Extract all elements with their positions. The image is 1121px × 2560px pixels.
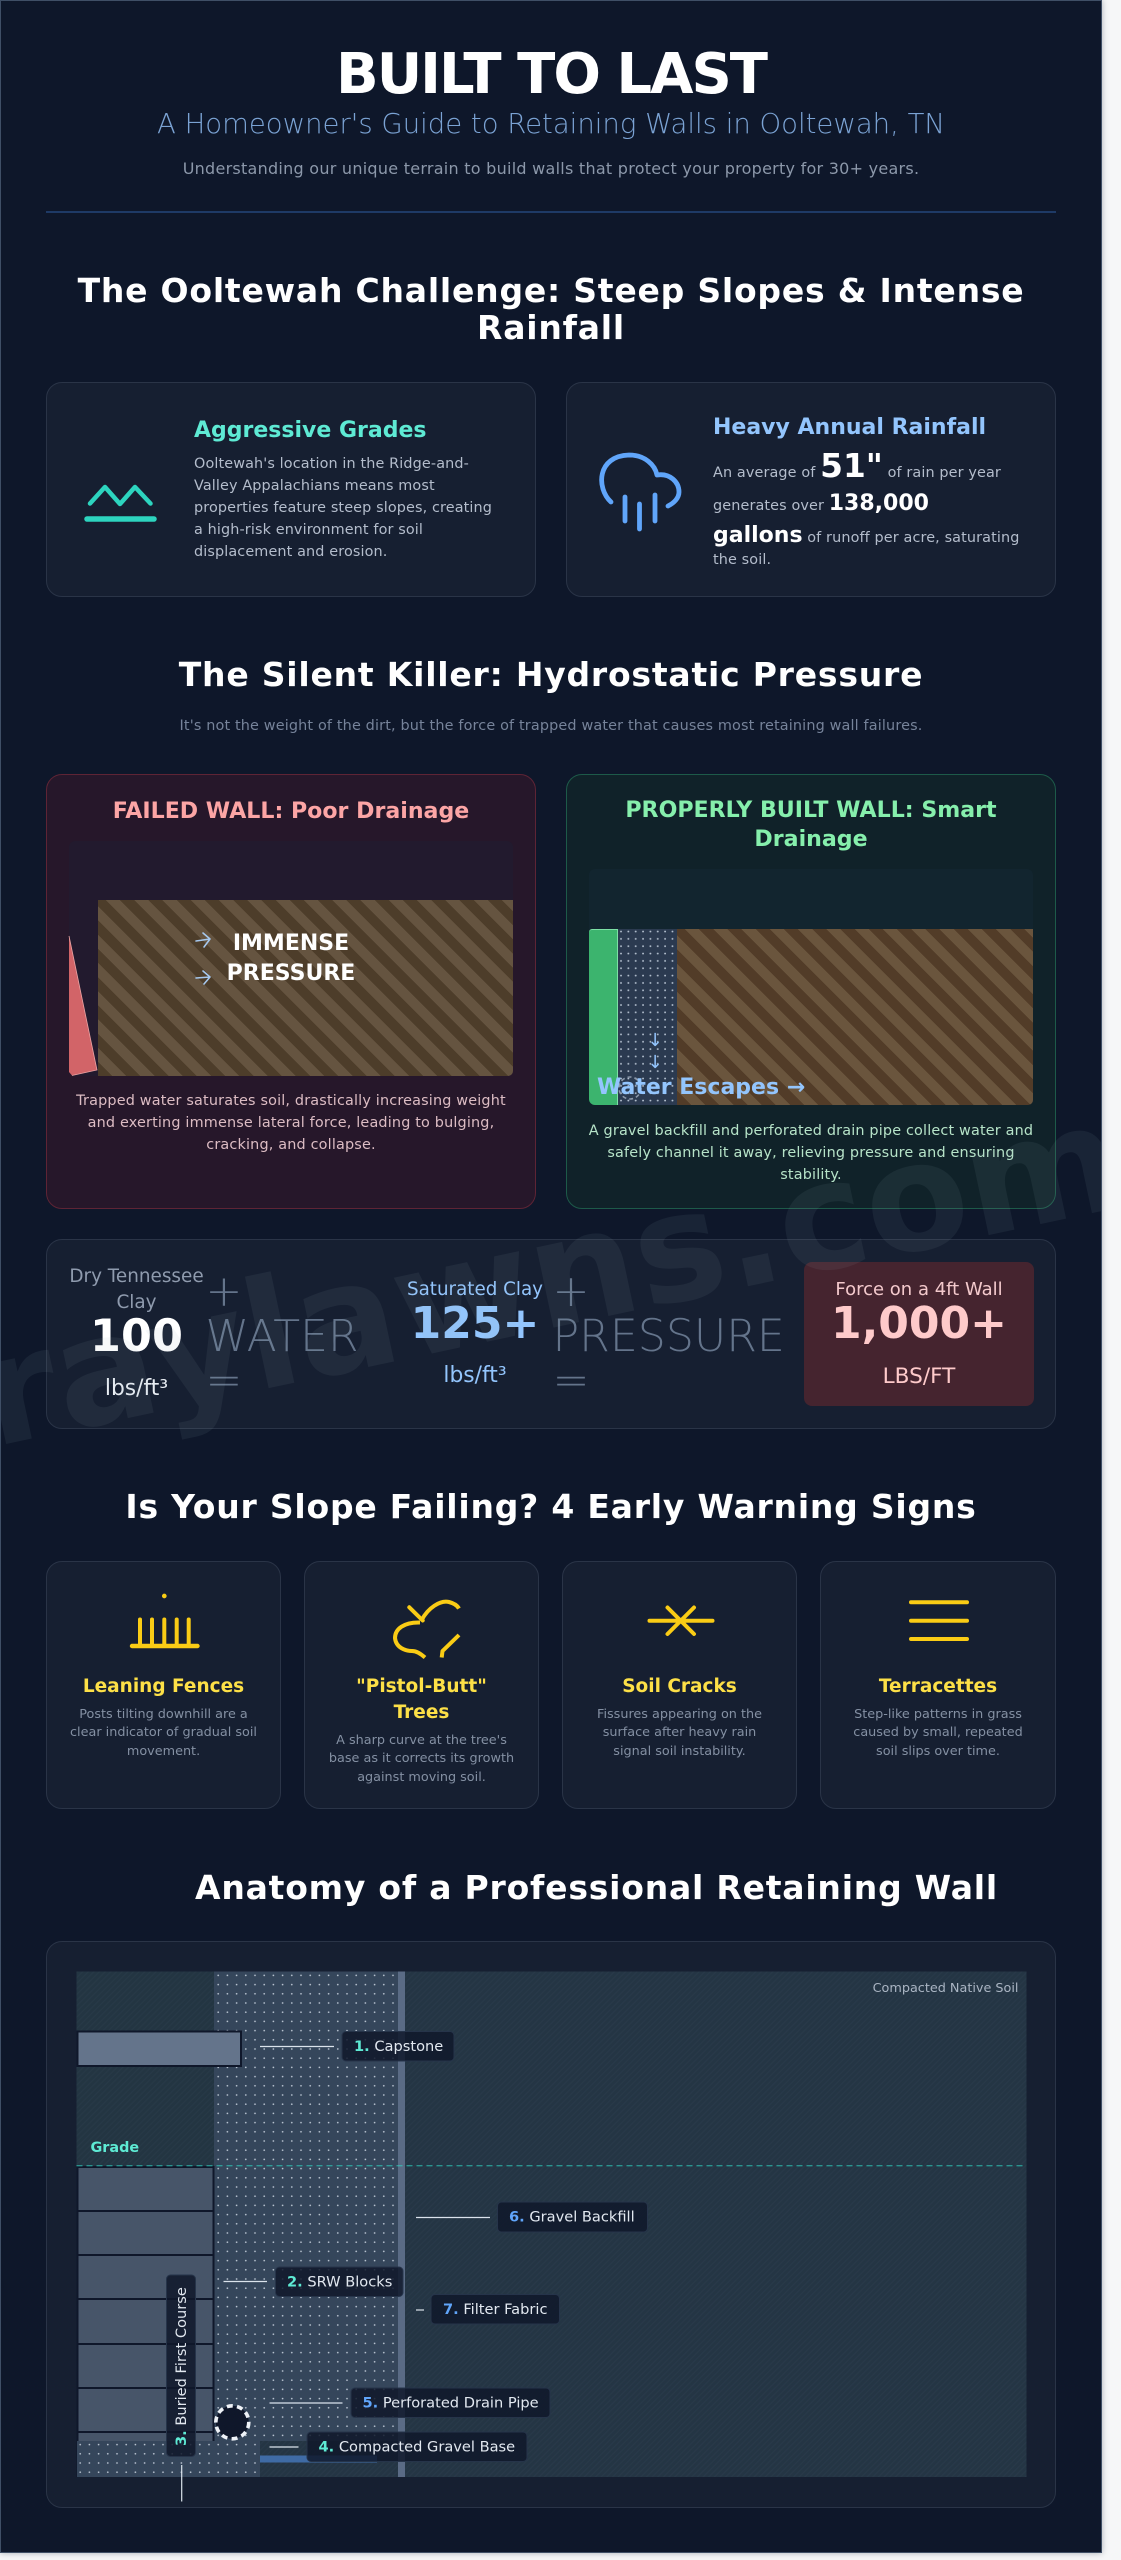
callout 7 filter fabric: [416, 2294, 560, 2324]
description: caused by small, repeated: [853, 1725, 1023, 1740]
heading: warning signs: Is Your Slope Failing? 4 Early Warning Signs: [125, 1486, 977, 1526]
panel: soil cracks: [562, 1561, 797, 1809]
callout 3 buried first course: [166, 2275, 196, 2502]
native soil label: Compacted Native Soil: [873, 1981, 1018, 1996]
proper wall caption: stability.: [780, 1167, 842, 1183]
leaning wall: [68, 936, 98, 1076]
pressure text: IMMENSE: [233, 931, 349, 956]
heading: The Ooltewah Challenge: [78, 271, 1024, 347]
description: surface after heavy rain: [603, 1725, 756, 1740]
callout 4 gravel base: 4. Compacted Gravel Base: [318, 2438, 515, 2456]
failed wall caption: Trapped water saturates soil, drastically increasing weight: [76, 1093, 506, 1109]
force value: 1,000+: [831, 1298, 1007, 1349]
card text: properties feature steep slopes, creating: [194, 500, 492, 516]
card text: [194, 456, 492, 560]
operator: plus pressure equals: PRESSURE: [552, 1310, 785, 1362]
callout 4 gravel base: [270, 2432, 527, 2462]
card text: Ooltewah's location in the Ridge-and-: [194, 456, 469, 472]
drain outlet pipe: [260, 2456, 377, 2462]
header: title block: [157, 42, 945, 178]
title: Leaning Fences: [83, 1676, 244, 1696]
panel: properly built wall: [566, 774, 1056, 1209]
panel: failed wall: [46, 774, 536, 1209]
title: "Pistol-Butt": [356, 1676, 487, 1696]
card text with statistics: gallons of runoff per acre, saturating: [713, 522, 1019, 548]
section subtitle: It's not the weight of the dirt, but the force of trapped water that causes most retaining wall failures.: [180, 718, 922, 734]
grade line: [76, 2165, 1026, 2167]
proper wall heading: Drainage: [754, 826, 868, 852]
capstone: [78, 2032, 241, 2066]
force label: Force on a 4ft Wall: [835, 1279, 1003, 1300]
callout 3 buried first course: 3. Buried First Course: [173, 2287, 190, 2446]
failed wall heading: FAILED WALL: Poor Drainage: [113, 798, 469, 824]
panel: terracettes: [820, 1561, 1056, 1809]
heading: anatomy: Anatomy of a Professional Retaining Wall: [195, 1868, 998, 1906]
panel: leaning fences: [46, 1561, 281, 1809]
card heading: Aggressive Grades: [194, 418, 426, 443]
panel: anatomy of wall: [46, 1941, 1056, 2508]
description: [853, 1707, 1023, 1759]
operator: plus pressure equals: =: [552, 1355, 590, 1406]
description: soil slips over time.: [876, 1744, 1000, 1759]
perforated drain pipe: [216, 2406, 249, 2439]
drain pipe: [618, 1076, 642, 1100]
down arrows: ↓: [647, 1052, 663, 1073]
grade label: Grade: [90, 2140, 139, 2156]
proper wall heading: [625, 797, 997, 852]
dry clay value: 100: [90, 1311, 183, 1362]
operator: plus pressure equals: +: [552, 1266, 590, 1317]
card text with statistics: [713, 447, 1019, 568]
gravel backfill: [618, 929, 677, 1105]
description: [329, 1733, 514, 1785]
failed wall diagram: [69, 841, 513, 1076]
icon: terraces: [909, 1600, 969, 1641]
dry clay label: [69, 1266, 204, 1313]
dry clay label: Dry Tennessee: [69, 1266, 204, 1287]
force unit: LBS/FT: [883, 1364, 955, 1389]
dry clay unit: lbs/ft³: [105, 1376, 168, 1401]
operator: plus pressure equals: [552, 1266, 785, 1406]
card text: a high-risk environment for soil: [194, 522, 423, 538]
icon: mountain grade: [84, 484, 157, 522]
dry clay label: Clay: [116, 1292, 157, 1313]
retaining wall: [589, 929, 618, 1105]
card text with statistics: generates over 138,000: [713, 490, 929, 516]
icon: fence: [130, 1594, 200, 1648]
title: Terracettes: [879, 1676, 997, 1696]
description: clear indicator of gradual soil: [70, 1725, 257, 1740]
icon: rain cloud: [599, 452, 682, 532]
filter fabric: [398, 1972, 405, 2477]
description: [597, 1707, 762, 1759]
water escapes text: Water Escapes →: [597, 1075, 805, 1100]
callout 6 gravel backfill: 6. Gravel Backfill: [509, 2208, 635, 2226]
failed wall caption: [76, 1093, 506, 1153]
down arrows: ↓: [647, 1030, 663, 1051]
card text: Valley Appalachians means most: [194, 478, 435, 494]
heading: The Ooltewah Challenge: The Ooltewah Challenge: Steep Slopes & Intense: [78, 271, 1024, 310]
proper wall caption: [588, 1123, 1033, 1183]
tagline: Understanding our unique terrain to build walls that protect your property for 30+ years.: [183, 159, 919, 178]
panel: pressure equation: [46, 1239, 1056, 1429]
saturated clay stat: [407, 1279, 543, 1388]
pressure text: [227, 931, 355, 986]
description: signal soil instability.: [613, 1744, 746, 1759]
description: base as it corrects its growth: [329, 1751, 514, 1766]
force result box: [804, 1262, 1034, 1406]
SRW blocks: [78, 2167, 214, 2476]
description: Posts tilting downhill are a: [79, 1707, 248, 1722]
description: [70, 1707, 257, 1759]
card text with statistics: An average of 51" of rain per year: [713, 447, 1001, 485]
proper wall diagram: [589, 869, 1033, 1105]
proper wall caption: safely channel it away, relieving pressure and ensuring: [607, 1145, 1015, 1161]
operator: plus water equals: +: [206, 1266, 242, 1317]
down arrows: [647, 1030, 663, 1073]
description: A sharp curve at the tree's: [336, 1733, 507, 1748]
saturated soil: [98, 900, 513, 1076]
pressure text: PRESSURE: [227, 960, 355, 986]
card text: displacement and erosion.: [194, 544, 387, 560]
native soil: [677, 929, 1033, 1105]
description: against moving soil.: [357, 1770, 486, 1785]
compacted gravel base: [77, 2441, 260, 2477]
saturated unit: lbs/ft³: [443, 1363, 507, 1388]
callout 7 filter fabric: 7. Filter Fabric: [443, 2301, 547, 2318]
card heading: Heavy Annual Rainfall: [713, 415, 986, 440]
pressure arrows: [195, 932, 211, 985]
gravel backfill: [214, 1972, 398, 2441]
callout 2 SRW blocks: [224, 2267, 403, 2296]
callout 5 drain pipe: 5. Perforated Drain Pipe: [362, 2394, 539, 2412]
heading: The Silent Killer: The Silent Killer: Hydrostatic Pressure: [179, 654, 923, 694]
native soil: [76, 1972, 1026, 2477]
title: [356, 1676, 487, 1722]
callout 2 SRW blocks: 2. SRW Blocks: [287, 2274, 392, 2290]
callout 1 capstone: 1. Capstone: [354, 2038, 443, 2055]
subtitle: A Homeowner's Guide to Retaining Walls in Ooltewah, TN: [157, 108, 945, 140]
callout 6 gravel backfill: [416, 2202, 648, 2232]
operator: plus water equals: =: [206, 1355, 242, 1406]
callout 5 drain pipe: [270, 2388, 550, 2418]
card text with statistics: the soil.: [713, 552, 771, 568]
proper wall caption: A gravel backfill and perforated drain pipe collect water and: [589, 1123, 1033, 1139]
panel: heavy annual rainfall: [566, 382, 1056, 597]
title: BUILT TO LAST: [336, 42, 766, 107]
proper wall heading: PROPERLY BUILT WALL: Smart: [625, 797, 997, 823]
description: Step-like patterns in grass: [854, 1707, 1022, 1722]
soil behind wall tint: [76, 1972, 214, 2166]
saturated value: 125+: [411, 1298, 539, 1349]
icon: cracks: [648, 1605, 714, 1636]
saturated label: Saturated Clay: [407, 1279, 543, 1300]
icon: tree: [393, 1600, 461, 1659]
panel: aggressive grades: [46, 382, 536, 597]
description: Fissures appearing on the: [597, 1707, 762, 1722]
operator: plus water equals: [206, 1266, 359, 1406]
failed wall caption: cracking, and collapse.: [206, 1137, 376, 1153]
title: Soil Cracks: [622, 1676, 737, 1696]
dry clay stat: [69, 1266, 204, 1401]
operator: plus water equals: WATER: [206, 1310, 359, 1362]
heading: The Ooltewah Challenge: Rainfall: [477, 308, 625, 347]
description: movement.: [127, 1744, 200, 1759]
panel: pistol-butt trees: [304, 1561, 539, 1809]
title: Trees: [394, 1702, 449, 1722]
callout 1 capstone: [260, 2032, 454, 2061]
failed wall caption: and exerting immense lateral force, leading to bulging,: [88, 1115, 494, 1131]
